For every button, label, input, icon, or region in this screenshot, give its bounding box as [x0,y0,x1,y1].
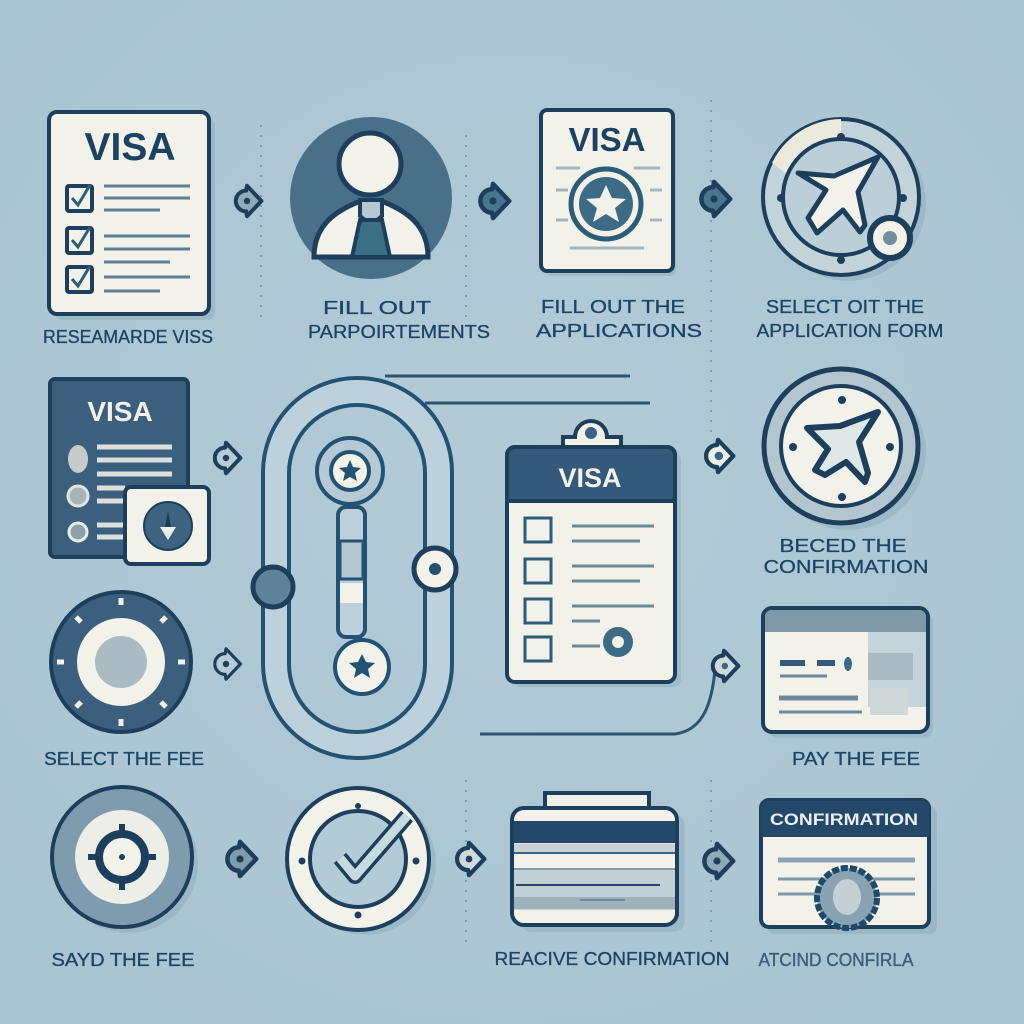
arrow 8 [227,842,256,876]
arrow 5 [706,440,733,472]
icon: target circle [52,787,198,933]
arrow 7 [713,651,738,681]
label line two: APPLICATIONS [536,321,702,341]
label: sayd the fee: SAYD THE FEE [52,950,194,970]
arrow 9 [457,843,484,875]
diagram: central looping route [253,376,715,758]
icon: person in circle [290,117,452,279]
label: confirmation: CONFIRMATION [764,557,928,577]
icon: fee circle dial [51,592,191,732]
heading: visa: VISA [87,396,153,427]
icon: visa clipboard [507,421,681,687]
icon: plane in ring [763,119,926,281]
label: select the fee: SELECT THE FEE [44,749,204,769]
label: fill out: FILL OUT [323,298,431,318]
icon: plane in circle [764,369,926,530]
arrow 10 [704,844,733,878]
label: attend confirmation: ATCIND CONFIRLA [758,950,914,970]
label: pay the fee: PAY THE FEE [792,749,920,769]
arrow 3 [701,182,730,216]
icon: visa document with star [541,110,676,276]
icon: check circle [287,788,436,935]
label line two: APPLICATION FORM [756,321,944,341]
label: fill out the applications: FILL OUT THE [541,297,685,317]
heading: visa: VISA [568,121,646,158]
label line two: PARPOIRTEMENTS [308,322,490,342]
heading: visa: VISA [84,126,176,169]
heading: visa: VISA [558,463,622,493]
arrow 6 [215,649,240,679]
label: receive confirmation: REACIVE CONFIRMATION [494,949,730,969]
icon: confirmation certificate [761,800,937,934]
heading: confirmation: CONFIRMATION [770,810,918,829]
icon: visa navy document [50,379,209,564]
arrow 4 [215,443,240,473]
label: select the: SELECT OIT THE [766,297,924,317]
label: research visa: RESEAMARDE VISS [43,327,213,347]
icon: payment card [763,608,933,738]
icon: confirmation folder [512,793,685,932]
label: beced the: BECED THE [780,536,906,556]
arrow 2 [480,184,509,218]
arrow 1 [236,186,261,216]
icon: visa checklist document [49,112,215,320]
